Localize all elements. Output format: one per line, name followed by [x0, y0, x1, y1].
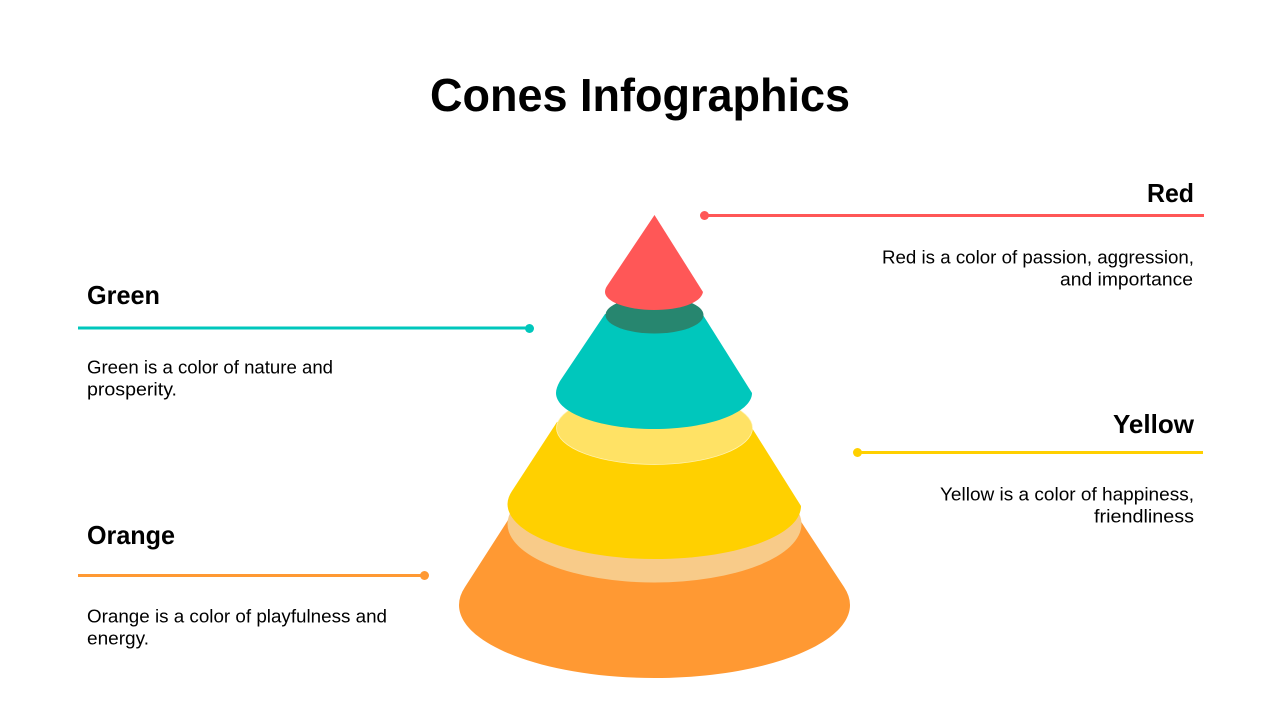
- description: orange: [87, 606, 387, 648]
- connector: orange: [78, 571, 429, 580]
- callout: yellow: [853, 409, 1203, 526]
- description: green: prosperity.: [87, 380, 177, 400]
- cone opening: dark green: [606, 296, 704, 334]
- heading: yellow: Yellow: [1113, 409, 1195, 439]
- connector: red: [700, 211, 1204, 220]
- description: yellow: friendliness: [1094, 506, 1194, 526]
- description: red: Red is a color of passion, aggression,: [882, 248, 1194, 268]
- cone layer: yellow: [508, 422, 801, 559]
- heading: orange: Orange: [87, 520, 175, 550]
- heading: red: Red: [1147, 178, 1194, 208]
- cone diagram: [459, 215, 850, 678]
- connector: yellow: [853, 448, 1203, 457]
- cone layer: teal: [556, 314, 752, 429]
- callout: red: [700, 178, 1204, 290]
- description: yellow: [940, 484, 1194, 526]
- cone opening: light orange: [508, 466, 802, 582]
- cone layer: orange: [459, 517, 850, 678]
- connector: green: [78, 324, 534, 333]
- callout: orange: [78, 520, 429, 648]
- callout: green: [78, 280, 534, 400]
- title: Cones Infographics: [430, 69, 850, 121]
- description: orange: energy.: [87, 628, 149, 648]
- description: green: [87, 358, 333, 400]
- description: yellow: Yellow is a color of happiness,: [940, 484, 1194, 504]
- cone layer: red: [605, 215, 703, 310]
- description: green: Green is a color of nature and: [87, 358, 333, 378]
- cone opening: light yellow: [556, 392, 752, 464]
- description: red: and importance: [1060, 270, 1193, 290]
- description: orange: Orange is a color of playfulness and: [87, 606, 387, 626]
- heading: green: Green: [87, 280, 160, 310]
- description: red: [882, 248, 1194, 290]
